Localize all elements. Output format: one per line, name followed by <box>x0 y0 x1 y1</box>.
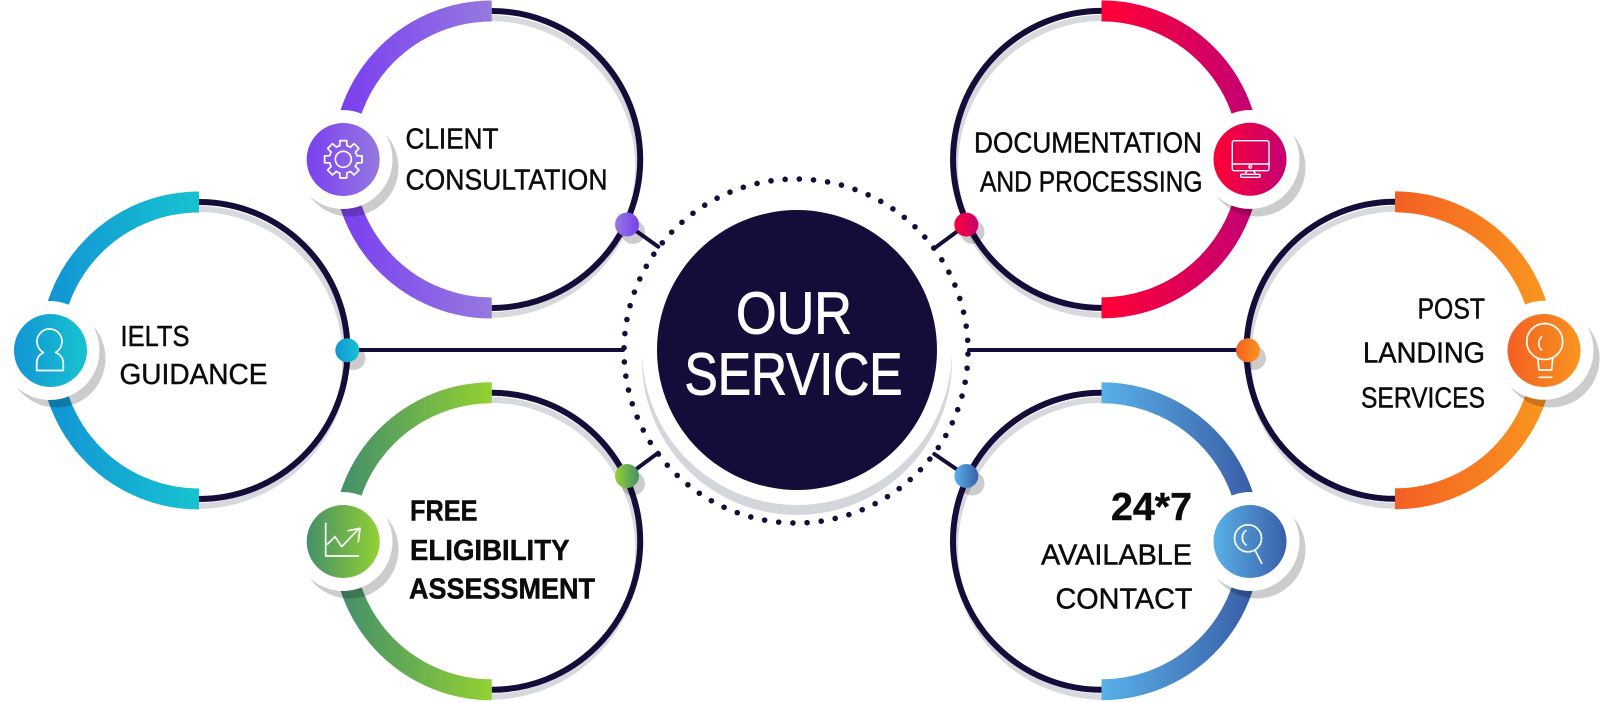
label: free eligibility assessment <box>409 496 596 606</box>
panel: documentation and processing <box>953 11 1306 315</box>
hub title: OUR <box>736 280 852 346</box>
icon: monitor <box>1232 141 1269 177</box>
icon: magnifier <box>1234 525 1262 563</box>
label: documentation and processing: DOCUMENTATION <box>974 128 1202 160</box>
panel: free eligibility assessment <box>294 393 645 697</box>
label: post landing services: LANDING <box>1363 338 1485 370</box>
label: client consultation: CLIENT <box>406 123 498 155</box>
hub title: SERVICE <box>684 342 902 408</box>
label: post landing services <box>1361 293 1485 414</box>
label: 24*7 available contact: AVAILABLE <box>1041 539 1192 571</box>
label: ielts guidance <box>120 321 268 391</box>
label: free eligibility assessment: FREE <box>410 496 478 528</box>
label: 24*7 available contact: CONTACT <box>1056 583 1192 615</box>
label: documentation and processing: AND PROCESSING <box>980 167 1202 199</box>
hub title <box>684 280 902 408</box>
panel: post landing services <box>1236 202 1600 506</box>
label: 24*7 available contact: 24*7 <box>1111 486 1192 529</box>
icon: light bulb <box>1527 324 1563 377</box>
icon: growth chart <box>326 523 360 556</box>
label: ielts guidance: GUIDANCE <box>120 359 268 391</box>
centre hub: our service <box>621 176 971 526</box>
label: ielts guidance: IELTS <box>120 321 190 353</box>
icon: gear <box>325 141 362 178</box>
label: free eligibility assessment: ASSESSMENT <box>409 574 596 606</box>
label: client consultation <box>406 123 608 196</box>
label: free eligibility assessment: ELIGIBILITY <box>410 535 570 567</box>
label: 24*7 available contact <box>1041 486 1192 615</box>
panel: client consultation <box>294 11 645 315</box>
panel: ielts guidance <box>0 202 366 506</box>
label: client consultation: CONSULTATION <box>406 164 608 196</box>
connector lines <box>347 224 1248 476</box>
label: documentation and processing <box>974 128 1202 199</box>
label: post landing services: POST <box>1418 293 1485 325</box>
panel: 24*7 available contact <box>953 393 1306 697</box>
label: post landing services: SERVICES <box>1361 382 1485 414</box>
icon: person <box>37 329 63 370</box>
